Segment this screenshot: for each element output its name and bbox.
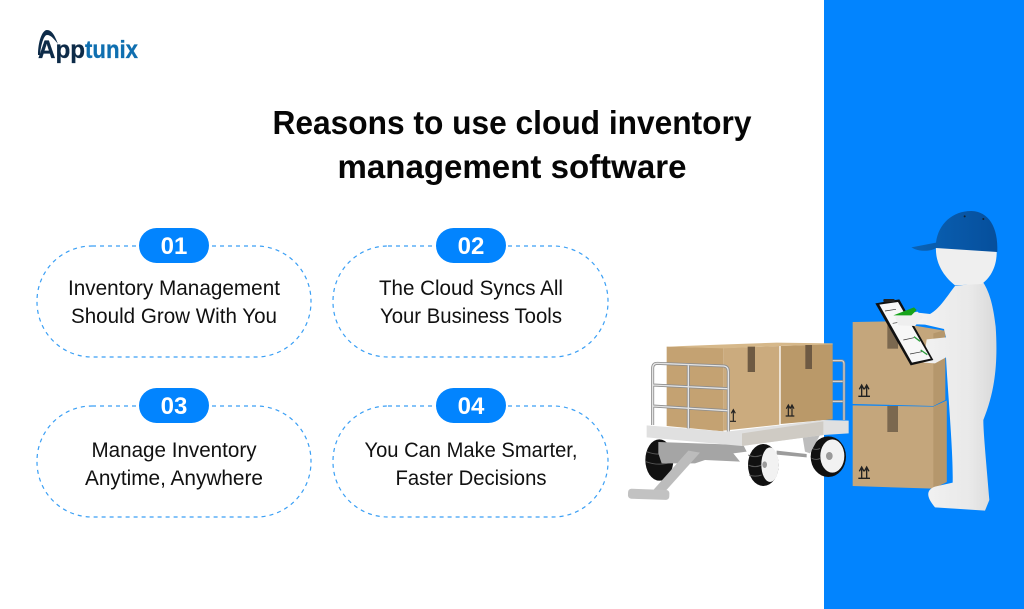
head — [936, 247, 997, 285]
card 03 — [37, 388, 311, 517]
cap — [911, 211, 997, 252]
card 02 text: The Cloud Syncs All — [379, 277, 563, 300]
card 03 text: Manage Inventory — [92, 439, 257, 462]
logo: Apptunix: tunix — [85, 36, 138, 64]
card 01 text — [68, 277, 280, 328]
card 03 text: Anytime, Anywhere — [85, 467, 263, 490]
blue side panel — [824, 0, 1024, 609]
clipboard — [875, 299, 933, 365]
badge 04: 04 — [458, 393, 485, 420]
badge 01: 01 — [161, 233, 187, 260]
badge 02: 02 — [458, 233, 484, 260]
badge 03 — [139, 388, 209, 423]
badge 02 — [436, 228, 506, 263]
rear wheels — [645, 436, 846, 481]
title: management software — [338, 148, 686, 185]
logo: Apptunix: App — [38, 36, 85, 64]
front wheel — [748, 444, 779, 486]
handling arrows lower box — [858, 467, 870, 478]
card 04 text — [364, 439, 578, 490]
handling arrows on cart box — [730, 405, 794, 421]
card 01 text: Should Grow With You — [71, 305, 277, 328]
illustration: worker with boxes — [853, 211, 997, 511]
card 04 — [333, 388, 608, 517]
upper box — [853, 321, 945, 406]
card 01 text: Inventory Management — [68, 277, 280, 300]
undercarriage — [628, 435, 820, 500]
card 02 — [333, 228, 608, 357]
pen and hand — [893, 307, 923, 326]
card 04 text: Faster Decisions — [396, 467, 546, 490]
platform — [647, 420, 849, 446]
logo: Apptunix — [38, 30, 138, 64]
badge 03: 03 — [161, 393, 187, 420]
badge 01 — [139, 228, 209, 263]
title: Reasons to use cloud inventory — [272, 104, 752, 141]
card 03 text — [85, 439, 263, 490]
title — [272, 104, 752, 185]
card 01 — [37, 228, 311, 357]
far rail — [833, 361, 844, 420]
boxes on cart — [667, 343, 833, 431]
card 04 text: You Can Make Smarter, — [364, 439, 578, 462]
badge 04 — [436, 388, 506, 423]
lower box — [853, 401, 947, 489]
front rail — [653, 363, 728, 432]
card 02 text: Your Business Tools — [380, 305, 562, 328]
illustration: cart with boxes — [628, 343, 849, 500]
person body — [908, 283, 996, 511]
handling arrows upper box — [858, 385, 870, 396]
card 02 text — [379, 277, 563, 328]
